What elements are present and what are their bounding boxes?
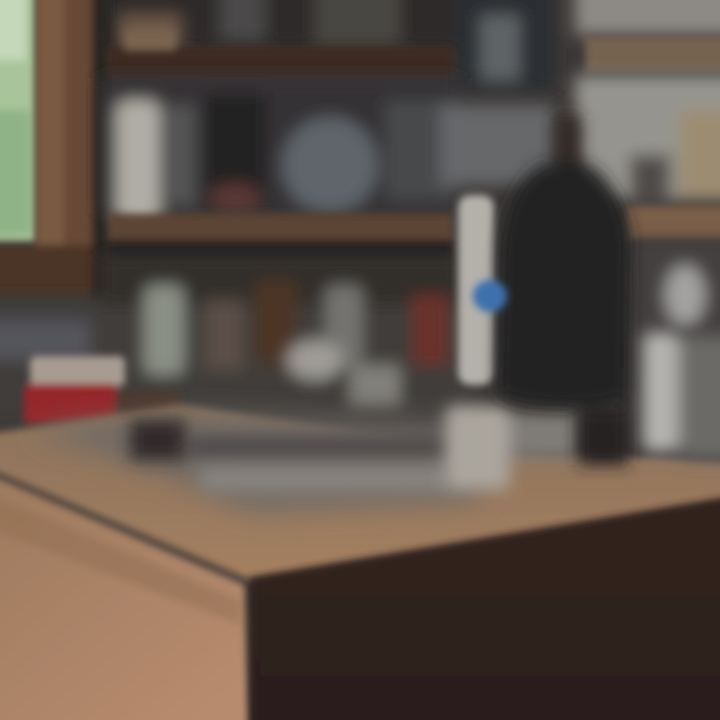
red container bbox=[24, 356, 180, 437]
middle shelf bbox=[108, 206, 720, 260]
counter left face bbox=[0, 470, 250, 720]
sink and metal items bbox=[30, 415, 480, 510]
white bottle bbox=[458, 195, 494, 385]
lower backsplash with items bbox=[0, 255, 470, 420]
counter surface bbox=[0, 405, 720, 580]
dark bottle bbox=[497, 115, 630, 465]
shelf contents bbox=[100, 75, 720, 225]
upper shelving area bbox=[95, 0, 720, 90]
right side background bbox=[630, 240, 720, 340]
top shelf bbox=[108, 30, 720, 77]
counter front dark panel bbox=[250, 495, 720, 720]
blue cap bbox=[473, 280, 507, 312]
window bbox=[0, 0, 36, 242]
white cup bbox=[445, 405, 580, 490]
sink detail bbox=[130, 420, 460, 492]
window frame bbox=[0, 0, 110, 300]
right bottles bbox=[642, 332, 720, 460]
